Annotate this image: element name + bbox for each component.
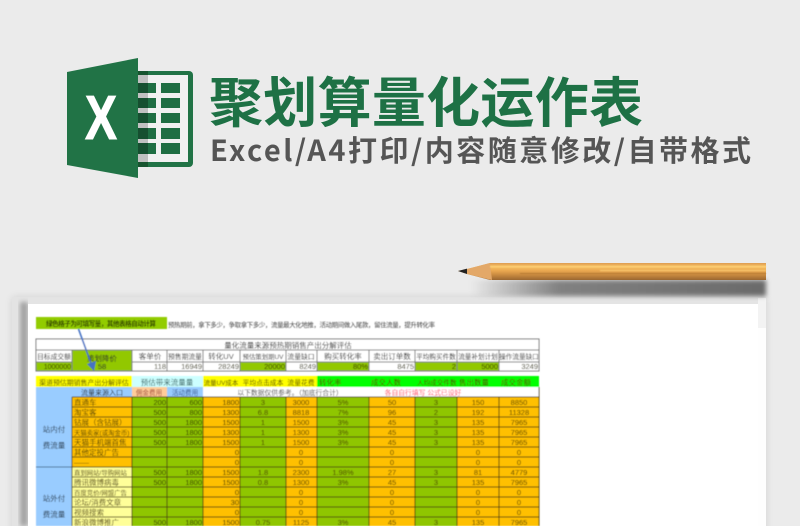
table: numeric columns: 0 [235, 488, 239, 497]
table: numeric columns: 1500 [222, 438, 239, 447]
table: top summary: 购买转化率 [324, 351, 362, 361]
table: row labels: 论坛/消费文章 [74, 497, 122, 507]
table: row labels: 天猫卖家(或淘金币) [74, 428, 129, 437]
table: numeric columns: 27 [388, 468, 396, 477]
table: numeric columns: 1 [261, 438, 265, 447]
table: top summary [36, 339, 539, 371]
table: row labels: 百度竞价/网盟广告 [74, 488, 128, 497]
table: numeric columns: 3 [434, 418, 438, 427]
table: numeric columns: 1300 [222, 408, 239, 417]
table: top summary: 80% [353, 362, 368, 371]
table: top summary: 客单价 [139, 351, 162, 361]
table: data colour columns [72, 387, 539, 526]
title: 聚划算量化运作表 [209, 59, 643, 138]
table: numeric columns: 0 [390, 498, 394, 507]
spreadsheet [36, 317, 539, 526]
table: numeric columns: 3 [434, 438, 438, 447]
table: numeric columns: 3 [261, 398, 265, 407]
table: numeric columns [153, 398, 529, 526]
table: numeric columns: 0.8 [258, 478, 268, 487]
table: left category labels: 站外付 [43, 493, 66, 503]
table: numeric columns: 30 [231, 498, 239, 507]
table: numeric columns: 45 [388, 478, 396, 487]
table: section header: 渠道预估期销售产出分解评估 [39, 378, 129, 387]
table: numeric columns: 0 [299, 458, 303, 467]
table: section header: 预估带来流量量 [141, 377, 194, 387]
table: top summary: 转化UV [208, 351, 234, 361]
table: numeric columns: 96 [388, 408, 396, 417]
table: numeric columns: 0 [235, 448, 239, 457]
table: numeric columns: 500 [153, 408, 166, 417]
table: numeric columns: 0 [476, 488, 480, 497]
table: numeric columns: 50 [388, 398, 396, 407]
table: numeric columns: 135 [472, 428, 484, 437]
paper stack [12, 297, 766, 526]
table: numeric columns: 1800 [222, 398, 239, 407]
table: left category labels: 站内付 [43, 424, 66, 434]
table: numeric columns: 1500 [222, 468, 239, 477]
table: top summary: 目标成交额 [37, 352, 71, 361]
table: numeric columns: 1800 [185, 478, 202, 487]
table: numeric columns: 3 [434, 468, 438, 477]
table: numeric columns: 7965 [511, 428, 527, 437]
table: numeric columns: 45 [388, 418, 396, 427]
table: numeric columns: 1800 [185, 468, 202, 477]
table: numeric columns: 0 [299, 488, 303, 497]
table: row labels [74, 397, 129, 526]
table: numeric columns: 0 [235, 458, 239, 467]
table: numeric columns: 2 [434, 408, 438, 417]
table: numeric columns: 0 [390, 488, 394, 497]
table: top summary: 平均购买件数 [416, 352, 456, 361]
table: top summary: 8249 [299, 362, 316, 371]
table: numeric columns: 0 [517, 448, 521, 457]
table: numeric columns: 0 [517, 498, 521, 507]
table: section header: 成交金额 [501, 377, 531, 387]
table: numeric columns: 45 [388, 438, 396, 447]
table: numeric columns: 0 [476, 458, 480, 467]
table: row labels: 钻展（含钻展） [74, 417, 126, 427]
table: numeric columns: 1.8 [258, 468, 268, 477]
table: numeric columns: 135 [472, 478, 484, 487]
table: numeric columns: 1 [261, 418, 265, 427]
table: section header: 平均点击成本 [243, 378, 284, 387]
table: numeric columns: 3 [434, 428, 438, 437]
table: top summary: 8475 [397, 362, 414, 371]
table: numeric columns: 5% [338, 398, 349, 407]
subtitle: Excel/A4打印/内容随意修改/自带格式 [210, 128, 751, 170]
table: section header: 售出数量 [459, 377, 489, 387]
icon: pencil [458, 263, 766, 296]
table: top summary: 28249 [218, 362, 239, 371]
table: numeric columns: 8818 [293, 408, 309, 417]
table: numeric columns: 45 [388, 428, 396, 437]
table: numeric columns: 1500 [222, 478, 239, 487]
table: numeric columns: 3000 [293, 398, 309, 407]
table: numeric columns: 500 [153, 468, 166, 477]
table: top summary: 16949 [181, 362, 202, 371]
table: numeric columns: 135 [472, 418, 484, 427]
note text: 预热期前，拿下多少，争取拿下多少，流量最大化地推，活动期间做入尾款，留住流量，提升转化率 [168, 320, 436, 329]
table: top summary: 卖出订单数 [373, 351, 411, 361]
icon: Excel logo: X [85, 84, 117, 153]
table: numeric columns: 0 [517, 488, 521, 497]
table: numeric columns: 0 [235, 508, 239, 517]
table: section header: 流量UV成本 [204, 378, 239, 387]
callout: green note: 绿色格子为可填写量，其他表格自动计算 [46, 319, 156, 328]
table: top summary: 1000000 [44, 364, 71, 371]
table: sub header: 流量来源入口 [81, 388, 123, 397]
table: top summary: 操作流量缺口 [499, 352, 539, 361]
table: sub header: 以下数据仅供参考。（加底行合计） [237, 388, 343, 397]
table: numeric columns: 1.98% [332, 468, 354, 477]
table: numeric columns: 0 [299, 448, 303, 457]
table: numeric columns: 0 [390, 448, 394, 457]
table: sub header: 各自自行填写 公式已设好 [385, 388, 462, 397]
table: top summary: 5000 [481, 362, 498, 371]
icon: Excel logo [67, 58, 193, 178]
table: numeric columns: 11328 [509, 408, 529, 417]
table: numeric columns: 3% [338, 478, 349, 487]
table: top summary: 20000 [264, 362, 285, 371]
table: numeric columns: 1500 [293, 418, 309, 427]
table: top summary: 2 [452, 362, 456, 371]
table: row labels: 淘宝客 [74, 407, 97, 417]
table: row labels: —— [74, 458, 90, 467]
table: numeric columns: 0 [476, 448, 480, 457]
table: numeric columns: 500 [153, 438, 166, 447]
table: row labels: 直通车 [74, 397, 97, 407]
table: row labels: 其他定投广告 [74, 447, 119, 457]
table: top summary: 118 [154, 362, 166, 371]
table: numeric columns: 81 [474, 468, 482, 477]
table: sub header [36, 387, 539, 526]
table: numeric columns: 0 [390, 458, 394, 467]
table: numeric columns: 7965 [511, 418, 527, 427]
table: numeric columns: 7965 [511, 478, 527, 487]
table: left category labels: 费流量 [43, 440, 66, 450]
table: numeric columns: 500 [153, 478, 166, 487]
table: numeric columns: 7965 [511, 438, 527, 447]
table: top summary: 3249 [521, 362, 538, 371]
table: numeric columns: 200 [153, 398, 166, 407]
table: top summary: 流量缺口 [287, 352, 315, 361]
table: row labels: 视频搜索 [74, 507, 104, 517]
table: numeric columns: 1300 [293, 478, 309, 487]
table: numeric columns: 500 [153, 428, 166, 437]
table: numeric columns: 0 [517, 458, 521, 467]
table: sub header: 佣金费用 [136, 388, 162, 397]
table: top summary: 预估策划期UV [243, 352, 284, 361]
table: numeric columns: 1500 [222, 418, 239, 427]
table: top summary: 流量补划计划 [458, 352, 498, 361]
table: section header: 转化率 [319, 377, 342, 387]
table: numeric columns: 1500 [293, 438, 309, 447]
table: numeric columns: 2300 [293, 468, 309, 477]
table: numeric columns: 0 [517, 508, 521, 517]
table: numeric columns: 3 [434, 478, 438, 487]
table: numeric columns: 0 [476, 508, 480, 517]
table: numeric columns: 800 [189, 408, 202, 417]
table: numeric columns: 0 [390, 508, 394, 517]
table: top summary: 预售期流量 [168, 352, 202, 361]
table: numeric columns: 6.8 [258, 408, 268, 417]
table: section header [36, 376, 539, 387]
table: sub header: 活动费用 [172, 388, 198, 397]
table: numeric columns: 0 [476, 498, 480, 507]
table: numeric columns: 0 [299, 508, 303, 517]
table: numeric columns: 8850 [511, 398, 527, 407]
table: top summary: 58 [98, 362, 106, 371]
table: row labels: 直到网站/导购网站 [74, 468, 128, 477]
table: numeric columns: 3% [338, 418, 349, 427]
table: numeric columns: 150 [472, 398, 484, 407]
table: left category labels [36, 424, 72, 519]
table: numeric columns: 7% [338, 408, 349, 417]
table: row labels: 腾讯微博病毒 [74, 477, 119, 487]
callout: green note [36, 317, 167, 329]
table: numeric columns: 3 [434, 398, 438, 407]
table: numeric columns: 500 [153, 418, 166, 427]
table: left category labels: 费流量 [43, 509, 66, 519]
table: numeric columns: 1800 [185, 438, 202, 447]
table: numeric columns: 4779 [511, 468, 527, 477]
table: numeric columns: 135 [472, 438, 484, 447]
table: top summary: 量化流量来源预热期销售产出分解评估 [224, 340, 352, 350]
table: section header: 人均成交件数 [417, 378, 457, 387]
table: numeric columns: 1300 [222, 428, 239, 437]
table: numeric columns: 3% [338, 428, 349, 437]
table: section header: 流量花费 [287, 378, 315, 387]
table: row labels: 天猫手机端首焦 [74, 437, 127, 447]
table: numeric columns: 1300 [293, 428, 309, 437]
arrow [78, 329, 96, 371]
table: numeric columns: 1 [261, 428, 265, 437]
table: numeric columns: 192 [472, 408, 484, 417]
table: section header: 成交人数 [371, 377, 401, 387]
table: numeric columns: 3% [338, 438, 349, 447]
table: numeric columns: 1800 [185, 428, 202, 437]
table: numeric columns: 0 [299, 498, 303, 507]
table: numeric columns: 600 [189, 398, 202, 407]
table: top summary: 策划降价 [87, 353, 117, 363]
table: numeric columns: 1800 [185, 418, 202, 427]
